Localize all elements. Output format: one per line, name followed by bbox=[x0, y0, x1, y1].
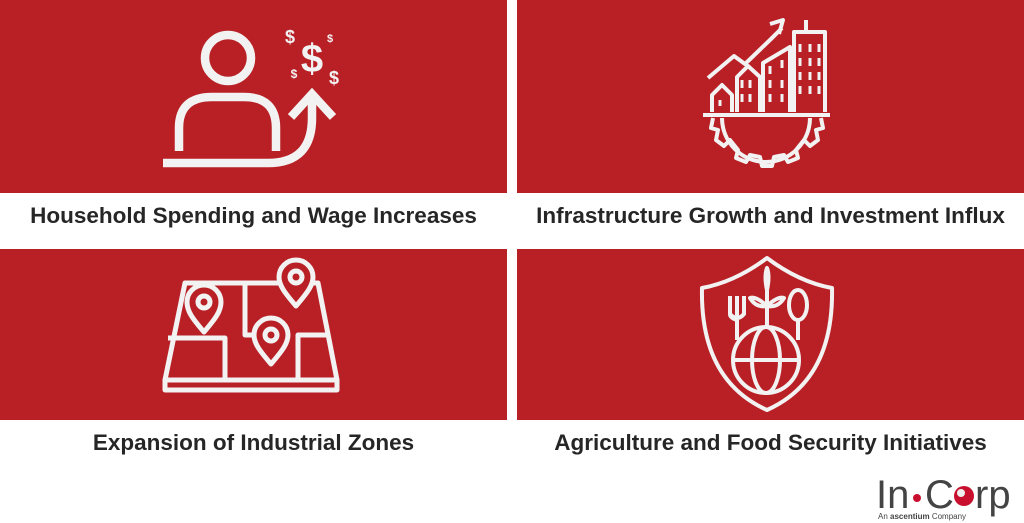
logo: InCorp: C bbox=[925, 473, 954, 517]
label: infrastructure: Infrastructure Growth and Investment Influx bbox=[536, 203, 1005, 228]
icon: person with wage arrow: $ bbox=[327, 33, 333, 45]
logo: InCorp: In bbox=[876, 473, 909, 517]
icon: buildings and gear bbox=[703, 20, 830, 166]
icon: map with pins bbox=[165, 260, 337, 390]
icon: person with wage arrow: $ bbox=[291, 67, 298, 81]
logo: InCorp bbox=[876, 473, 1011, 521]
label: agriculture: Agriculture and Food Security Initiatives bbox=[554, 430, 987, 455]
panel: infrastructure bbox=[517, 0, 1024, 193]
logo: InCorp: rp bbox=[975, 473, 1011, 517]
panel: household spending bbox=[0, 0, 507, 193]
icon: person with wage arrow: $ bbox=[301, 37, 323, 81]
icon: person with wage arrow: $ bbox=[285, 27, 295, 47]
panel: agriculture bbox=[517, 249, 1024, 420]
logo: InCorp: An ascentium Company bbox=[878, 512, 966, 521]
label: industrial: Expansion of Industrial Zones bbox=[93, 430, 414, 455]
panel: industrial zones bbox=[0, 249, 507, 420]
label: household: Household Spending and Wage Increases bbox=[30, 203, 477, 228]
icon: person with wage arrow bbox=[163, 27, 339, 163]
icon: person with wage arrow: $ bbox=[329, 68, 339, 88]
icon: shield with globe and food bbox=[702, 258, 832, 410]
